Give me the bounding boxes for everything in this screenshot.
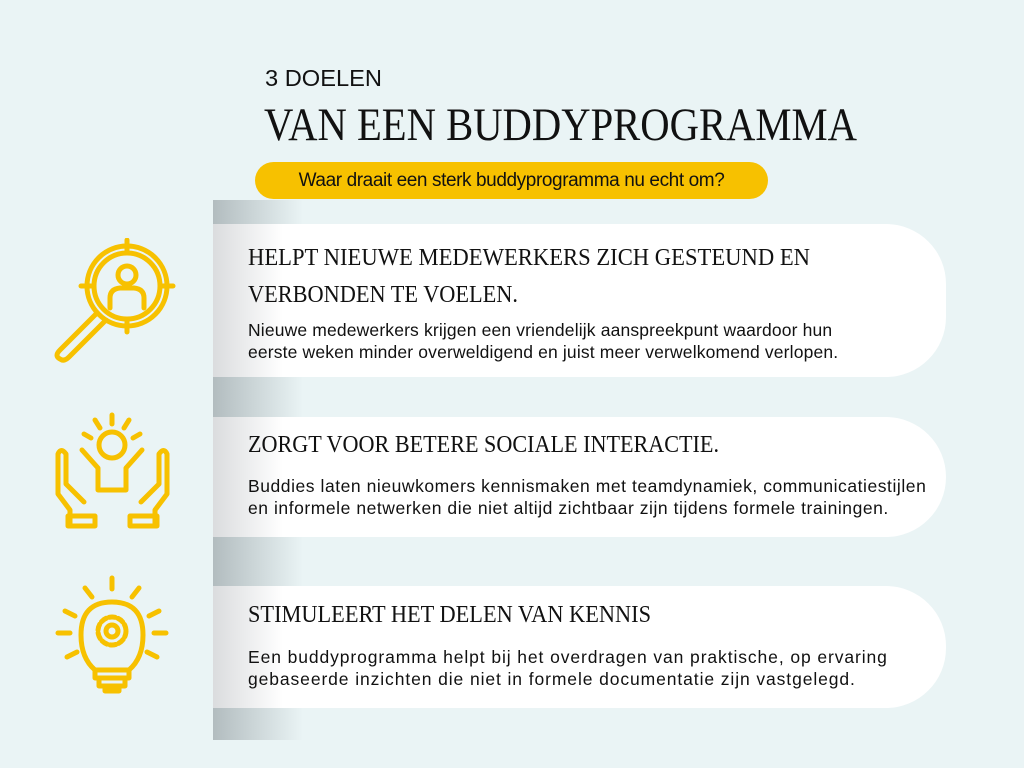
heading 1 [248, 245, 810, 304]
heading 2: ZORGT VOOR BETERE SOCIALE INTERACTIE. [248, 432, 719, 458]
heading 1: HELPT NIEUWE MEDEWERKERS ZICH GESTEUND EN [248, 245, 810, 271]
body 3: gebaseerde inzichten die niet in formele documentatie zijn vastgelegd. [248, 669, 856, 689]
body 1: Nieuwe medewerkers krijgen een vriendelijk aanspreekpunt waardoor hun [248, 320, 832, 340]
icon: hands with person [56, 412, 170, 528]
body 3: Een buddyprogramma helpt bij het overdragen van praktische, op ervaring [248, 647, 888, 667]
body 1: eerste weken minder overweldigend en juist meer verwelkomend verlopen. [248, 342, 838, 362]
body 3 [248, 647, 888, 689]
icon: lightbulb with gear [56, 576, 168, 694]
main title: VAN EEN BUDDYPROGRAMMA [264, 99, 857, 151]
icon: magnifier person [54, 238, 176, 363]
card 2 [213, 417, 946, 537]
body 2: Buddies laten nieuwkomers kennismaken met teamdynamiek, communicatiestijlen [248, 476, 926, 496]
subtitle: 3 doelen: 3 DOELEN [265, 65, 382, 91]
heading 3: STIMULEERT HET DELEN VAN KENNIS [248, 602, 651, 628]
body 2: en informele netwerken die niet altijd zichtbaar zijn tijdens formele trainingen. [248, 498, 889, 518]
body 1 [248, 320, 838, 362]
pill: question: Waar draait een sterk buddyprogramma nu echt om? [299, 170, 724, 191]
card 3 [213, 586, 946, 708]
card 1 [213, 224, 946, 377]
left shadow column [213, 200, 303, 740]
pill: question [255, 162, 768, 199]
body 2 [248, 476, 926, 518]
title [264, 65, 857, 151]
